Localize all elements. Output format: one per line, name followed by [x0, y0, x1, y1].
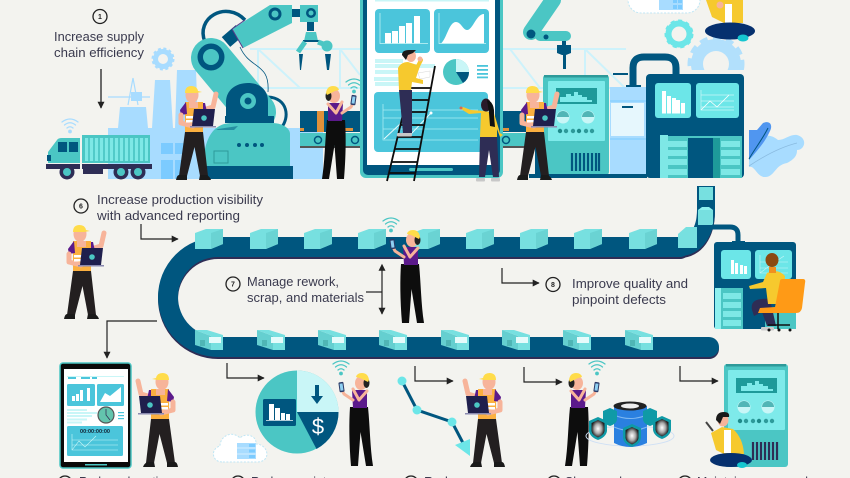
step 1 label: Increase supply: [54, 29, 144, 44]
step 6 label: [74, 192, 264, 223]
step 6 label: Increase production visibility: [97, 192, 264, 207]
arrow: to pie chart: [227, 363, 264, 378]
cloud: bottom: [213, 434, 267, 462]
woman pointing: [460, 98, 503, 182]
step 8 label: [546, 276, 688, 307]
worker: bottom left: [138, 373, 178, 467]
arrow: double between belts: [366, 270, 382, 314]
step 8 label: pinpoint defects: [572, 292, 667, 307]
step 7 label: 7: [231, 282, 235, 288]
control machine: bottom right: [724, 364, 788, 467]
ladder: [387, 66, 435, 181]
arrow: to database: [524, 367, 562, 382]
small tablet dashboard: 00:00:00:00: [80, 429, 110, 435]
database with shields: [586, 402, 674, 447]
control machine: top right: [529, 75, 630, 178]
woman with phone: bottom pie: [333, 361, 373, 466]
arrow: to machine: [680, 366, 718, 381]
person sitting with phone: [706, 412, 752, 468]
bottom labels clipped by the page edge: [58, 474, 808, 478]
step 6 label: with advanced reporting: [96, 208, 240, 223]
arrow: to truck: [100, 69, 102, 108]
step 7 label: Manage rework,: [247, 274, 339, 289]
small tablet dashboard: [60, 363, 131, 468]
person sitting: top: [705, 0, 755, 42]
arrow: step 6 to belt: [141, 224, 178, 239]
conveyor: top right: [502, 111, 543, 148]
arrow: to trend line: [415, 366, 453, 381]
person on ladder: [397, 50, 430, 136]
worker: top right: [517, 86, 557, 180]
downward trend line: [398, 376, 470, 456]
main conveyor belt: [168, 186, 709, 349]
truss framework: [250, 49, 626, 88]
conveyor: top left: [300, 111, 360, 148]
arrow: to step 8: [502, 268, 539, 283]
worker: top left: [176, 86, 216, 180]
step 6 label: 6: [79, 204, 83, 210]
woman with phone: bottom database: [565, 361, 605, 466]
step 1 label: chain efficiency: [54, 45, 144, 60]
control station with operator: [712, 227, 805, 332]
icon: truck: [46, 119, 152, 180]
boxes: bottom belt: [195, 330, 653, 350]
step 8 label: Improve quality and: [572, 276, 688, 291]
woman with phone: middle: [383, 218, 424, 323]
worker: middle left: [64, 225, 104, 319]
background factory skyline: [108, 48, 323, 179]
arrow: belt to tablet: [107, 321, 157, 358]
worker: bottom middle: [465, 373, 505, 467]
cloud: top: [628, 0, 700, 13]
drill arm: [526, 0, 571, 69]
woman with phone: top: [322, 79, 362, 179]
step 7 label: scrap, and materials: [247, 290, 364, 305]
machine: large dashboard cabinet: [646, 74, 744, 178]
machine: pipe and cabinet: [610, 57, 676, 178]
boxes: top belt: [195, 187, 713, 249]
large tablet dashboard: [360, 0, 503, 178]
leaf: [749, 122, 804, 177]
pie chart: [256, 370, 339, 454]
step 7 label: [226, 274, 364, 305]
step 8 label: 8: [551, 282, 555, 289]
step 1 label: [54, 10, 144, 60]
gears: [664, 20, 744, 70]
pie chart: $: [312, 414, 324, 439]
robot arm: [198, 5, 332, 179]
step 1 label: 1: [98, 14, 102, 21]
